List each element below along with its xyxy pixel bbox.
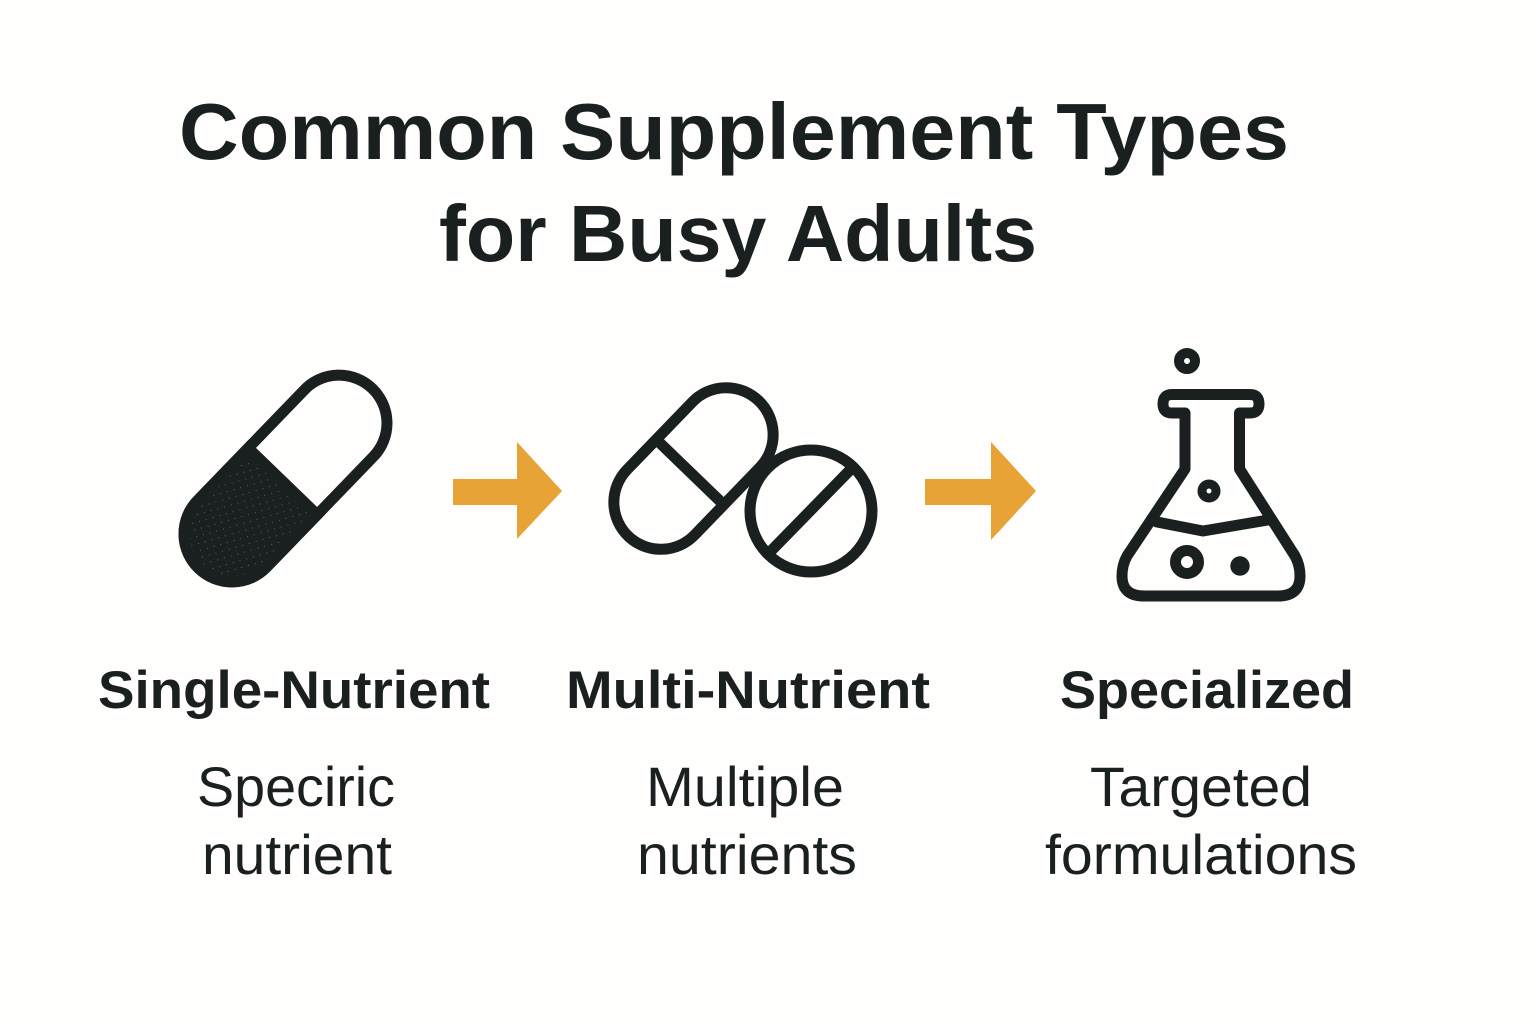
text: Multiple nutrients: nutrients <box>637 823 857 886</box>
arrow: first <box>453 442 562 539</box>
title: for Busy Adults <box>439 189 1037 278</box>
heading: Multi-Nutrient: Multi-Nutrient <box>566 661 930 720</box>
icon: capsule and tablet <box>594 368 872 572</box>
arrow: second <box>925 442 1036 540</box>
text: Multiple nutrients: Multiple <box>646 755 844 818</box>
text: Speciric nutrient: nutrient <box>202 823 392 886</box>
title <box>179 87 1289 278</box>
heading: Single-Nutrient: Single-Nutrient <box>98 661 490 720</box>
title: Common Supplement Types <box>179 87 1289 176</box>
text: Multiple nutrients <box>637 755 857 886</box>
icon: flask <box>1122 353 1300 596</box>
text: Speciric nutrient: Speciric <box>197 755 395 818</box>
text: Targeted formulations: Targeted <box>1090 755 1312 818</box>
text: Speciric nutrient <box>197 755 395 886</box>
icon: half-filled capsule <box>164 355 407 602</box>
text: Targeted formulations: formulations <box>1045 823 1357 886</box>
heading: Specialized: Specialized <box>1060 661 1354 720</box>
text: Targeted formulations <box>1045 755 1357 886</box>
